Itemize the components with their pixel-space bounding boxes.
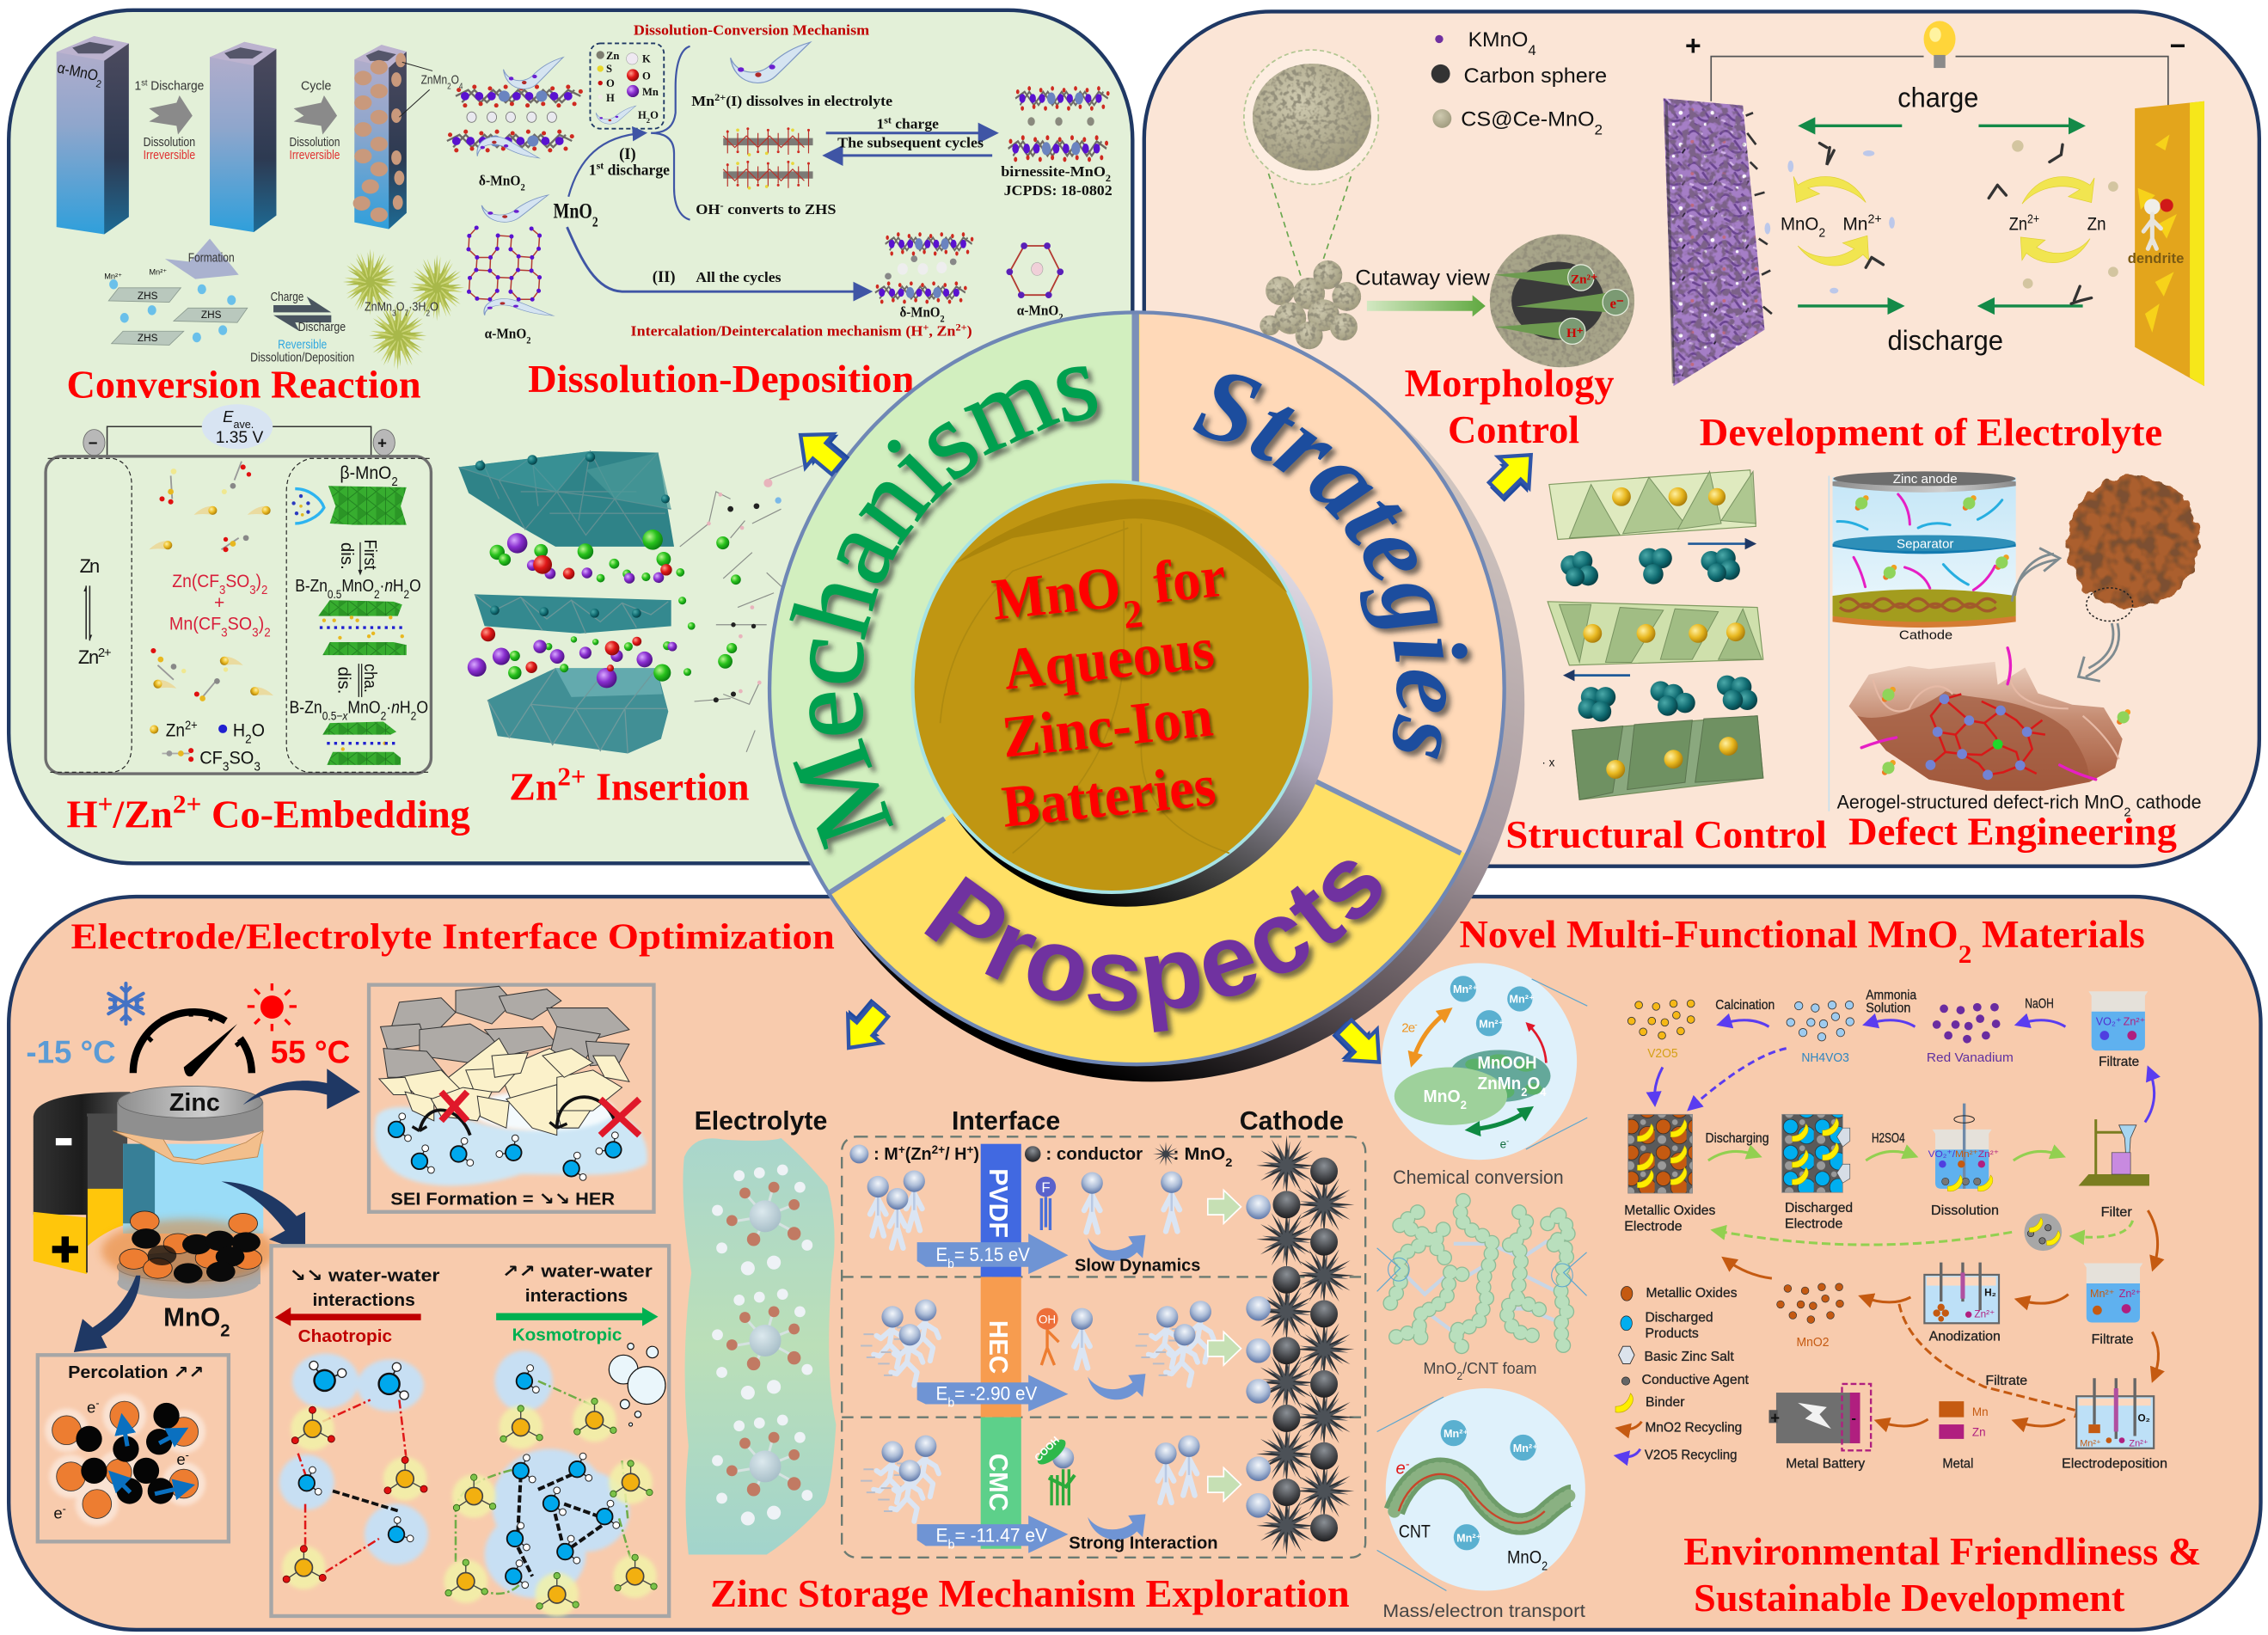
diagram: recycling flow: + bbox=[1770, 1408, 1780, 1426]
diagram: ZHS formation and charge/discharge: Reversible bbox=[278, 337, 327, 352]
box: percolation: e- bbox=[176, 1449, 189, 1468]
diagram: electrolyte development cell: + bbox=[1685, 30, 1701, 61]
diagram: conversion reaction tubes: ZnMn2O4 bbox=[421, 73, 463, 91]
diagram: interface: : conductor bbox=[1045, 1145, 1143, 1164]
box: water interactions: ↗↗ water-water bbox=[502, 1262, 653, 1281]
diagram: dissolution-deposition mechanism: (II) bbox=[653, 269, 676, 286]
heading: dissolution-deposition: Dissolution-Deposition bbox=[528, 358, 914, 401]
diagram: battery: Zinc bbox=[169, 1089, 220, 1117]
icon: gauge bbox=[133, 1009, 252, 1076]
diagram: ZHS formation and charge/discharge: Dissolution/Deposition bbox=[250, 351, 354, 365]
diagram: ZHS formation and charge/discharge: Mn²⁺ bbox=[104, 272, 122, 281]
diagram: dissolution-deposition mechanism: birnessite-MnO 2 bbox=[1001, 163, 1111, 184]
diagram: recycling flow: Metallic Oxides bbox=[1646, 1286, 1738, 1301]
circle: mass/electron transport: CNT bbox=[1399, 1522, 1431, 1541]
box: SEI formation: SEI Formation = ↘↘ HER bbox=[390, 1190, 616, 1209]
arrow: electrolyte to water panel bbox=[221, 1181, 305, 1252]
diagram: electrolyte development cell: MnO2 bbox=[1781, 214, 1825, 240]
diagram: interface: : MnO 2 bbox=[1173, 1145, 1233, 1169]
heading: novel materials: Novel Multi-Functional MnO 2 Materials bbox=[1460, 913, 2145, 968]
diagram: recycling flow: Ammonia bbox=[1866, 988, 1916, 1002]
diagram: MnO2/CNT foam: MnO2/CNT foam bbox=[1423, 1359, 1537, 1382]
diagram: ZHS formation and charge/discharge: Formation bbox=[188, 250, 235, 265]
diagram: ZHS formation and charge/discharge bbox=[104, 239, 466, 373]
circle: chemical conversion: Chemical conversion bbox=[1393, 1167, 1564, 1188]
heading: development of electrolyte: Development of Electrolyte bbox=[1700, 411, 2162, 454]
heading: dissolution-conversion mechanism: Dissolution-Conversion Mechanism bbox=[634, 21, 869, 38]
diagram: recycling flow: Zn²⁺ bbox=[2124, 1016, 2145, 1028]
label: 55 C: 55 °C bbox=[271, 1033, 350, 1069]
diagram: interface: HEC bbox=[984, 1320, 1012, 1374]
diagram: dissolution-deposition mechanism: JCPDS: 18-0802 bbox=[1004, 182, 1113, 199]
diagram: H+/Zn2+ co-embedding cell: Zn bbox=[80, 555, 100, 577]
diagram: electrolyte development cell: dendrite bbox=[2128, 250, 2184, 266]
diagram: H+/Zn2+ co-embedding cell: + bbox=[377, 434, 387, 452]
arrow: to mechanisms bbox=[787, 416, 856, 485]
diagram: H+/Zn2+ co-embedding cell: B-Zn0.5−xMnO2·nH2O bbox=[290, 698, 428, 722]
diagram: recycling flow: Filtrate bbox=[2099, 1055, 2139, 1069]
diagram: dissolution-deposition mechanism: O bbox=[642, 70, 651, 83]
diagram: recycling flow: Metal Battery bbox=[1786, 1457, 1865, 1472]
diagram: recycling flow: Dissolution bbox=[1931, 1203, 1999, 1218]
diagram: recycling flow: Electrode bbox=[1624, 1220, 1683, 1234]
diagram: dissolution-deposition mechanism: (I) bbox=[619, 146, 636, 163]
diagram: ZHS formation and charge/discharge: ZnMn3O7·3H2O bbox=[365, 300, 438, 318]
diagram: interface: Cathode bbox=[1240, 1107, 1344, 1136]
diagram: conversion reaction tubes: α-MnO2 bbox=[55, 58, 105, 90]
arrow: to interface bbox=[830, 992, 898, 1062]
diagram: recycling flow: Filtrate bbox=[1985, 1374, 2027, 1388]
diagram: recycling flow: Electrodeposition bbox=[2062, 1457, 2167, 1472]
arrow: to strategies bbox=[1479, 439, 1548, 509]
diagram: recycling flow: Solution bbox=[1866, 1001, 1910, 1016]
circle: mass/electron transport: Mn²⁺ bbox=[1444, 1428, 1468, 1440]
diagram: conversion reaction tubes: Dissolution bbox=[290, 135, 340, 150]
circle: mass/electron transport: MnO2 bbox=[1507, 1548, 1548, 1574]
diagram: ZHS formation and charge/discharge: Charge bbox=[271, 290, 303, 304]
heading: zinc storage: Zinc Storage Mechanism Exploration bbox=[710, 1572, 1350, 1615]
diagram: H+/Zn2+ co-embedding cell: 1.35 V bbox=[216, 428, 263, 447]
diagram: electrolyte development cell: Zn2+ bbox=[2009, 212, 2039, 234]
diagram: interface: F bbox=[1041, 1179, 1051, 1196]
diagram: H+/Zn2+ co-embedding cell: dis. bbox=[334, 667, 353, 695]
diagram: defect engineering bbox=[1829, 471, 2202, 819]
diagram: electrolyte column bbox=[683, 1107, 836, 1554]
diagram: recycling flow: MnO2 bbox=[1796, 1335, 1830, 1350]
diagram: dissolution-deposition mechanism: α-MnO2 bbox=[485, 326, 531, 346]
title: MnO2 for Aqueous Zinc-Ion Batteries: Zinc-Ion bbox=[999, 683, 1216, 770]
diagram: battery bbox=[34, 1086, 275, 1340]
diagram: H+/Zn2+ co-embedding cell: B-Zn0.5MnO2·nH2O bbox=[295, 577, 421, 601]
diagram: interface: Strong Interaction bbox=[1069, 1534, 1218, 1553]
title: MnO2 for Aqueous Zinc-Ion Batteries: Batteries bbox=[999, 752, 1218, 840]
diagram: defect engineering: Cathode bbox=[1899, 628, 1952, 643]
circle: mass/electron transport bbox=[1377, 1388, 1585, 1621]
diagram: morphology control: Zn²⁺ bbox=[1571, 273, 1597, 287]
diagram: H+/Zn2+ co-embedding cell: CF3SO3 bbox=[199, 748, 261, 774]
diagram: electrolyte development cell bbox=[1664, 21, 2204, 386]
diagram: structural control: · x bbox=[1542, 756, 1555, 769]
diagram: recycling flow: Mn bbox=[1972, 1405, 1989, 1418]
diagram: recycling flow bbox=[1615, 988, 2167, 1472]
heading: defect engineering: Defect Engineering bbox=[1848, 810, 2177, 853]
diagram: electrolyte development cell: − bbox=[2170, 30, 2185, 61]
diagram: dissolution-deposition mechanism: H bbox=[606, 92, 615, 104]
box: percolation: e- bbox=[87, 1398, 100, 1417]
diagram: recycling flow: Metal bbox=[1942, 1457, 1973, 1472]
diagram: dissolution-deposition mechanism: S bbox=[606, 63, 612, 75]
diagram: recycling flow: Anodization bbox=[1929, 1329, 2001, 1344]
diagram: ZHS formation and charge/discharge: ZHS bbox=[201, 309, 222, 321]
icon: sun bbox=[248, 983, 297, 1031]
diagram: ZHS formation and charge/discharge: ZHS bbox=[138, 333, 158, 344]
diagram: H+/Zn2+ co-embedding cell: Zn2+ bbox=[166, 719, 198, 740]
diagram: recycling flow: V2O5 Recycling bbox=[1645, 1448, 1738, 1462]
diagram: recycling flow: V2O5 bbox=[1647, 1046, 1678, 1061]
panel: strategies bbox=[1144, 11, 2259, 866]
heading: co-embedding: H+/Zn2+ Co-Embedding bbox=[66, 788, 470, 836]
icon: snowflake bbox=[108, 983, 144, 1024]
diagram: dissolution-deposition mechanism: 1st charge bbox=[877, 116, 939, 132]
diagram: ZHS formation and charge/discharge: Mn²⁺ bbox=[149, 268, 167, 277]
diagram: recycling flow: - bbox=[1851, 1410, 1856, 1426]
diagram: conversion reaction tubes: Irreversible bbox=[144, 148, 195, 162]
diagram: Zn2+ insertion crystal bbox=[458, 451, 803, 753]
diagram: morphology control: CS@Ce-MnO 2 bbox=[1461, 107, 1603, 138]
diagram: ZHS formation and charge/discharge: ZHS bbox=[138, 291, 158, 302]
diagram: defect engineering: Separator bbox=[1897, 537, 1953, 552]
diagram: dissolution-deposition mechanism: O bbox=[606, 77, 615, 89]
diagram: defect engineering: Zinc anode bbox=[1893, 472, 1958, 487]
arrow: zinc to SEI bbox=[243, 1069, 360, 1109]
box: percolation: Percolation ↗↗ bbox=[68, 1363, 204, 1382]
heading: environmental friendliness: Environmental Friendliness & bbox=[1683, 1530, 2202, 1573]
box: water interactions: Kosmotropic bbox=[512, 1326, 622, 1344]
diagram: interface: : M+(Zn2+/ H+) bbox=[873, 1143, 979, 1164]
diagram: interface: Eb= -2.90 eV bbox=[936, 1382, 1038, 1410]
diagram: recycling flow: NH4VO3 bbox=[1801, 1050, 1849, 1065]
diagram: recycling flow: Zn²⁺ bbox=[2119, 1288, 2141, 1300]
diagram: dissolution-deposition mechanism: MnO2 bbox=[554, 199, 598, 230]
circle: chemical conversion: MnO2 bbox=[1423, 1087, 1467, 1111]
circle: chemical conversion bbox=[1382, 963, 1587, 1188]
diagram: H+/Zn2+ co-embedding cell: Zn2+ bbox=[78, 646, 112, 668]
heading: morphology control bbox=[1405, 362, 1615, 451]
diagram: recycling flow: VO₂⁺ bbox=[2096, 1016, 2122, 1028]
label: Strategies: Strategies bbox=[1192, 375, 1475, 767]
circle: chemical conversion: Mn²⁺ bbox=[1479, 1018, 1504, 1030]
diagram: morphology control: e⁻ bbox=[1609, 295, 1624, 311]
diagram: recycling flow: Binder bbox=[1646, 1395, 1684, 1410]
diagram: recycling flow: Basic Zinc Salt bbox=[1645, 1350, 1735, 1364]
diagram: conversion reaction tubes: Irreversible bbox=[290, 148, 340, 162]
diagram: recycling flow: Red Vanadium bbox=[1927, 1050, 2014, 1065]
title: MnO2 for Aqueous Zinc-Ion Batteries bbox=[989, 543, 1230, 840]
box: water interactions: interactions bbox=[525, 1287, 628, 1306]
heading: Zn2+ insertion: Zn2+ Insertion bbox=[509, 761, 750, 808]
circle: chemical conversion: MnOOH bbox=[1478, 1054, 1537, 1073]
box: water interactions: Chaotropic bbox=[298, 1327, 392, 1346]
box: water interactions: interactions bbox=[312, 1291, 415, 1310]
diagram: H+/Zn2+ co-embedding cell: Eave. bbox=[223, 407, 254, 431]
diagram: dissolution-deposition mechanism: OH - converts to ZHS bbox=[696, 201, 836, 217]
diagram: dissolution-deposition mechanism: Intercalation/Deintercalation mechanism (H +, Zn 2+) bbox=[631, 322, 972, 339]
circle: chemical conversion: e- bbox=[1500, 1137, 1509, 1151]
diagram: morphology control: Cutaway view bbox=[1355, 266, 1491, 290]
box: percolation bbox=[38, 1355, 229, 1541]
diagram: H+/Zn2+ co-embedding cell: Zn(CF3SO3)2 bbox=[172, 572, 267, 597]
arrow: to novel materials bbox=[1325, 1010, 1395, 1080]
center disc bbox=[913, 481, 1333, 907]
diagram: dissolution-deposition mechanism: 1st discharge bbox=[589, 160, 670, 179]
diagram: H+/Zn2+ co-embedding cell: Mn(CF3SO3)2 bbox=[169, 615, 271, 640]
diagram: H+/Zn2+ co-embedding cell bbox=[46, 404, 431, 774]
diagram: recycling flow: MnO2 Recycling bbox=[1646, 1420, 1742, 1435]
diagram: dissolution-deposition mechanism: Mn bbox=[642, 86, 659, 98]
heading: structural control: Structural Control bbox=[1505, 813, 1827, 856]
diagram: recycling flow: O₂ bbox=[2138, 1413, 2150, 1424]
diagram: recycling flow: H₂ bbox=[1984, 1287, 1996, 1298]
diagram: recycling flow: Filtrate bbox=[2092, 1332, 2133, 1347]
diagram: H+/Zn2+ co-embedding cell: + bbox=[214, 593, 224, 613]
diagram: recycling flow: Conductive Agent bbox=[1641, 1373, 1750, 1387]
diagram: recycling flow: VO₂⁺/Mn²⁺Zn²⁺ bbox=[1928, 1149, 1999, 1160]
diagram: morphology control: Carbon sphere bbox=[1464, 64, 1607, 88]
box: water interactions bbox=[272, 1246, 669, 1616]
diagram: electrolyte development cell: Mn2+ bbox=[1842, 212, 1882, 234]
diagram: recycling flow: NaOH bbox=[2025, 997, 2054, 1012]
diagram: dissolution-deposition mechanism: Mn 2+(I) dissolves in electrolyte bbox=[691, 93, 893, 109]
diagram: interface: Interface bbox=[952, 1107, 1060, 1136]
diagram: dissolution-deposition mechanism: The subsequent cycles bbox=[837, 135, 984, 151]
diagram: interface: Slow Dynamics bbox=[1075, 1257, 1200, 1276]
diagram: dissolution-deposition mechanism: δ-MnO2 bbox=[479, 172, 525, 193]
diagram: H+/Zn2+ co-embedding cell: − bbox=[89, 434, 98, 452]
diagram: morphology control: KMnO4 bbox=[1468, 28, 1536, 58]
diagram: recycling flow: Products bbox=[1646, 1326, 1699, 1341]
diagram: interface: OH bbox=[1039, 1313, 1056, 1326]
diagram: dissolution-deposition mechanism: H2O bbox=[638, 109, 659, 125]
label: -15 C: -15 °C bbox=[26, 1033, 116, 1069]
circle: chemical conversion: 2e- bbox=[1401, 1020, 1418, 1035]
diagram: conversion reaction tubes bbox=[55, 36, 463, 235]
diagram: conversion reaction tubes: Dissolution bbox=[144, 135, 195, 150]
heading: morphology control: Control bbox=[1448, 408, 1579, 451]
diagram: H+/Zn2+ co-embedding cell: β-MnO2 bbox=[340, 463, 398, 489]
diagram: recycling flow: Mn²⁺ bbox=[2080, 1438, 2101, 1448]
diagram: H+/Zn2+ co-embedding cell: cha. bbox=[360, 664, 379, 693]
diagram: recycling flow: Mn²⁺ bbox=[2090, 1288, 2114, 1300]
diagram: interface: COOH bbox=[1033, 1435, 1062, 1464]
diagram: recycling flow: Electrode bbox=[1785, 1216, 1842, 1231]
diagram: H+/Zn2+ co-embedding cell: dis. bbox=[337, 542, 356, 570]
diagram: interface: Eb= 5.15 eV bbox=[936, 1244, 1030, 1271]
diagram: dissolution-deposition mechanism: K bbox=[642, 52, 651, 64]
title: MnO2 for Aqueous Zinc-Ion Batteries: MnO2 for bbox=[989, 543, 1230, 652]
diagram: recycling flow: Zn²⁺ bbox=[1974, 1309, 1995, 1320]
diagram: recycling flow: Metallic Oxides bbox=[1624, 1203, 1716, 1218]
diagram: dissolution-deposition mechanism: All the cycles bbox=[696, 269, 782, 285]
circle: mass/electron transport: e- bbox=[1395, 1457, 1410, 1478]
box: SEI formation bbox=[369, 985, 653, 1212]
diagram: recycling flow: Filter bbox=[2101, 1205, 2132, 1220]
diagram: dissolution-deposition mechanism: Zn bbox=[606, 50, 619, 62]
box: water interactions: ↘↘ water-water bbox=[290, 1267, 440, 1286]
diagram: electrolyte development cell: Zn bbox=[2087, 214, 2106, 234]
circle: chemical conversion: Mn²⁺ bbox=[1453, 983, 1478, 995]
diagram: dissolution-deposition mechanism: δ-MnO2 bbox=[899, 303, 945, 324]
diagram: morphology control bbox=[1244, 28, 1634, 367]
diagram: defect engineering: Aerogel-structured defect-rich MnO2 cathode bbox=[1837, 791, 2202, 819]
diagram: recycling flow: H2SO4 bbox=[1872, 1131, 1905, 1146]
diagram: interface: CMC bbox=[984, 1454, 1012, 1511]
diagram: H+/Zn2+ co-embedding cell: H2O bbox=[233, 720, 265, 746]
diagram: conversion reaction tubes: Cycle bbox=[301, 78, 331, 93]
circle: mass/electron transport: Mn²⁺ bbox=[1456, 1532, 1481, 1544]
diagram: recycling flow: Zn²⁺ bbox=[2129, 1438, 2148, 1448]
circle: mass/electron transport: Mass/electron transport bbox=[1382, 1601, 1585, 1621]
arrow: MnO2 to percolation bbox=[74, 1276, 140, 1352]
diagram: MnO2/CNT foam bbox=[1377, 1201, 1587, 1382]
diagram: recycling flow: Zn bbox=[1972, 1426, 1986, 1439]
diagram: recycling flow: Discharged bbox=[1785, 1201, 1853, 1216]
diagram: electrolyte column: Electrolyte bbox=[695, 1107, 827, 1136]
panel: prospects bbox=[9, 897, 2261, 1630]
label: Prospects: Prospects bbox=[924, 860, 1389, 1040]
diagram: recycling flow: Discharged bbox=[1646, 1311, 1713, 1326]
diagram: dissolution-deposition mechanism: α-MnO2 bbox=[1017, 303, 1064, 323]
diagram: H+/Zn2+ co-embedding cell: First bbox=[360, 539, 379, 570]
circle: chemical conversion: Mn²⁺ bbox=[1510, 994, 1535, 1006]
diagram: electrolyte development cell: charge bbox=[1897, 82, 1978, 113]
label: Mechanisms: Mechanisms bbox=[789, 366, 1106, 856]
heading: environmental friendliness: Sustainable Development bbox=[1694, 1577, 2124, 1620]
diagram: interface: Eb= -11.47 eV bbox=[936, 1524, 1047, 1552]
circle: chemical conversion: ZnMn2O4 bbox=[1478, 1075, 1547, 1098]
circle: mass/electron transport: Mn²⁺ bbox=[1513, 1442, 1538, 1454]
wheel: mechanisms strategies prospects bbox=[767, 310, 1525, 1081]
diagram: structural control bbox=[1542, 470, 1763, 799]
diagram: morphology control: H⁺ bbox=[1566, 327, 1584, 340]
diagram: conversion reaction tubes: 1st Discharge bbox=[135, 78, 204, 93]
diagram: electrolyte development cell: discharge bbox=[1887, 325, 2003, 356]
diagram: recycling flow: Calcination bbox=[1715, 998, 1775, 1013]
diagram: interface: PVDF bbox=[984, 1168, 1012, 1238]
diagram: dissolution-deposition mechanism bbox=[447, 42, 1113, 346]
title: MnO2 for Aqueous Zinc-Ion Batteries: Aqueous bbox=[1001, 615, 1217, 702]
diagram: ZHS formation and charge/discharge: Discharge bbox=[298, 320, 346, 334]
panel: mechanisms bbox=[9, 10, 1132, 863]
diagram: interface bbox=[842, 1107, 1365, 1558]
heading: electrode/electrolyte interface: Electrode/Electrolyte Interface Optimization bbox=[71, 918, 835, 958]
box: percolation: e- bbox=[53, 1503, 66, 1522]
heading: conversion reaction: Conversion Reaction bbox=[66, 364, 421, 407]
diagram: battery: MnO2 bbox=[163, 1304, 230, 1340]
diagram: recycling flow: Discharging bbox=[1706, 1131, 1769, 1146]
heading: environmental friendliness bbox=[1683, 1530, 2202, 1620]
heading: morphology control: Morphology bbox=[1405, 362, 1615, 405]
